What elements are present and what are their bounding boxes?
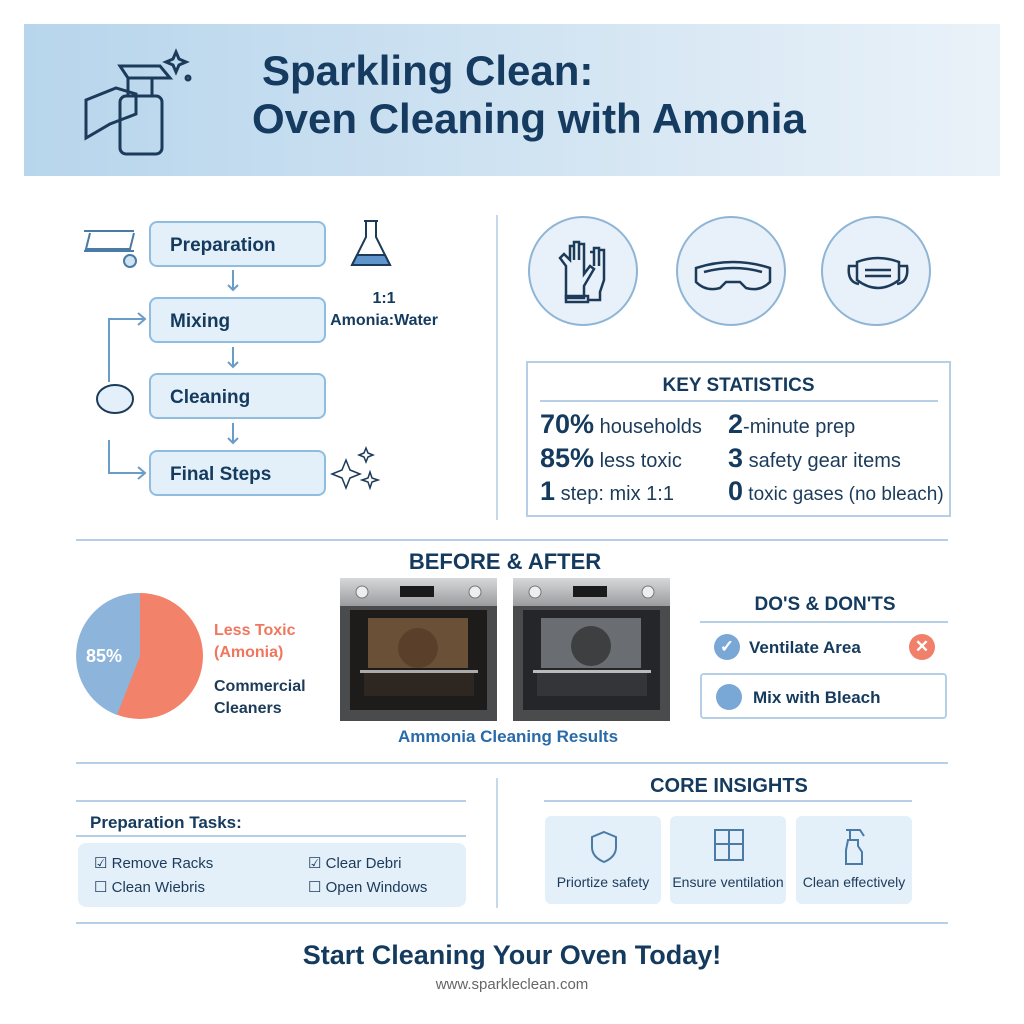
title: Sparkling Clean: bbox=[262, 47, 593, 94]
pie chart bbox=[76, 593, 306, 719]
heading: before & after: BEFORE & AFTER bbox=[409, 549, 601, 574]
heading: DO'S & DON'TS bbox=[754, 594, 896, 615]
icon: gloves bbox=[528, 216, 638, 326]
card: clean bbox=[796, 816, 912, 904]
card: safety: Priortize safety bbox=[557, 874, 649, 890]
do: ventilate bbox=[714, 634, 935, 660]
icon: mask bbox=[821, 216, 931, 326]
don't: bleach bbox=[700, 673, 947, 719]
heading: Preparation Tasks: bbox=[90, 813, 242, 832]
footer url: www.sparkleclean.com bbox=[436, 976, 588, 993]
header banner bbox=[24, 24, 1000, 176]
pie chart: Commercial bbox=[214, 678, 306, 695]
ratio label bbox=[330, 290, 438, 329]
oven after bbox=[513, 578, 670, 721]
card: ventilation: Ensure ventilation bbox=[672, 874, 784, 890]
step: Preparation bbox=[149, 221, 326, 267]
step: Cleaning: Cleaning bbox=[170, 387, 250, 408]
stat rows: 70% households bbox=[540, 409, 702, 439]
card: safety bbox=[545, 816, 661, 904]
pie labels: Less Toxic bbox=[214, 622, 296, 639]
do's and don'ts bbox=[700, 594, 948, 719]
arrows bbox=[96, 270, 380, 490]
title bbox=[252, 47, 806, 142]
step: Cleaning bbox=[149, 373, 326, 419]
caption: Ammonia Cleaning Results bbox=[398, 727, 618, 746]
checklist: ☐ Clean Wiebris bbox=[94, 879, 205, 896]
key statistics box bbox=[526, 361, 951, 517]
card: clean: Clean effectively bbox=[803, 874, 905, 890]
icon: tray bbox=[84, 230, 137, 268]
key statistics box: 2-minute prep bbox=[728, 409, 855, 439]
ratio label: 1:1 bbox=[372, 290, 396, 307]
heading: CORE INSIGHTS bbox=[650, 775, 808, 797]
do: ventilate: Ventilate Area bbox=[749, 638, 861, 657]
oven before bbox=[340, 578, 497, 721]
flowchart: steps bbox=[84, 220, 438, 496]
do: ventilate: ✓ bbox=[720, 637, 734, 656]
icon: goggles bbox=[676, 216, 786, 326]
step: Final Steps: Final Steps bbox=[170, 464, 271, 485]
heading: KEY STATISTICS bbox=[662, 375, 815, 396]
card: ventilation bbox=[670, 816, 786, 904]
pie chart: 85% bbox=[86, 646, 122, 666]
pie labels bbox=[214, 622, 296, 661]
step: Mixing bbox=[149, 297, 326, 343]
checklist: ☑ Clear Debri bbox=[308, 855, 401, 872]
step: Preparation: Preparation bbox=[170, 235, 276, 256]
checklist bbox=[78, 843, 466, 907]
key statistics box: 3 safety gear items bbox=[728, 443, 901, 473]
key statistics box: 1 step: mix 1:1 bbox=[540, 476, 674, 506]
footer call to action: Start Cleaning Your Oven Today! bbox=[303, 940, 721, 970]
key statistics box: 0 toxic gases (no bleach) bbox=[728, 476, 944, 506]
key statistics box: 85% less toxic bbox=[540, 443, 682, 473]
icon: spray bottle bbox=[84, 48, 192, 156]
step: Mixing: Mixing bbox=[170, 311, 230, 332]
ratio label: Amonia:Water bbox=[330, 312, 438, 329]
don't: bleach: Mix with Bleach bbox=[753, 688, 881, 707]
safety icons bbox=[528, 216, 931, 326]
icon: flask bbox=[350, 220, 392, 266]
preparation tasks bbox=[76, 800, 466, 907]
checklist: ☑ Remove Racks bbox=[94, 855, 213, 872]
oven photos bbox=[340, 578, 670, 721]
pie chart: Cleaners bbox=[214, 700, 282, 717]
checklist: ☐ Open Windows bbox=[308, 879, 427, 896]
title: Oven Cleaning with Amonia bbox=[252, 95, 806, 142]
do: ventilate: ✕ bbox=[915, 637, 929, 656]
pie labels: (Amonia) bbox=[214, 644, 283, 661]
step: Final Steps bbox=[149, 450, 326, 496]
